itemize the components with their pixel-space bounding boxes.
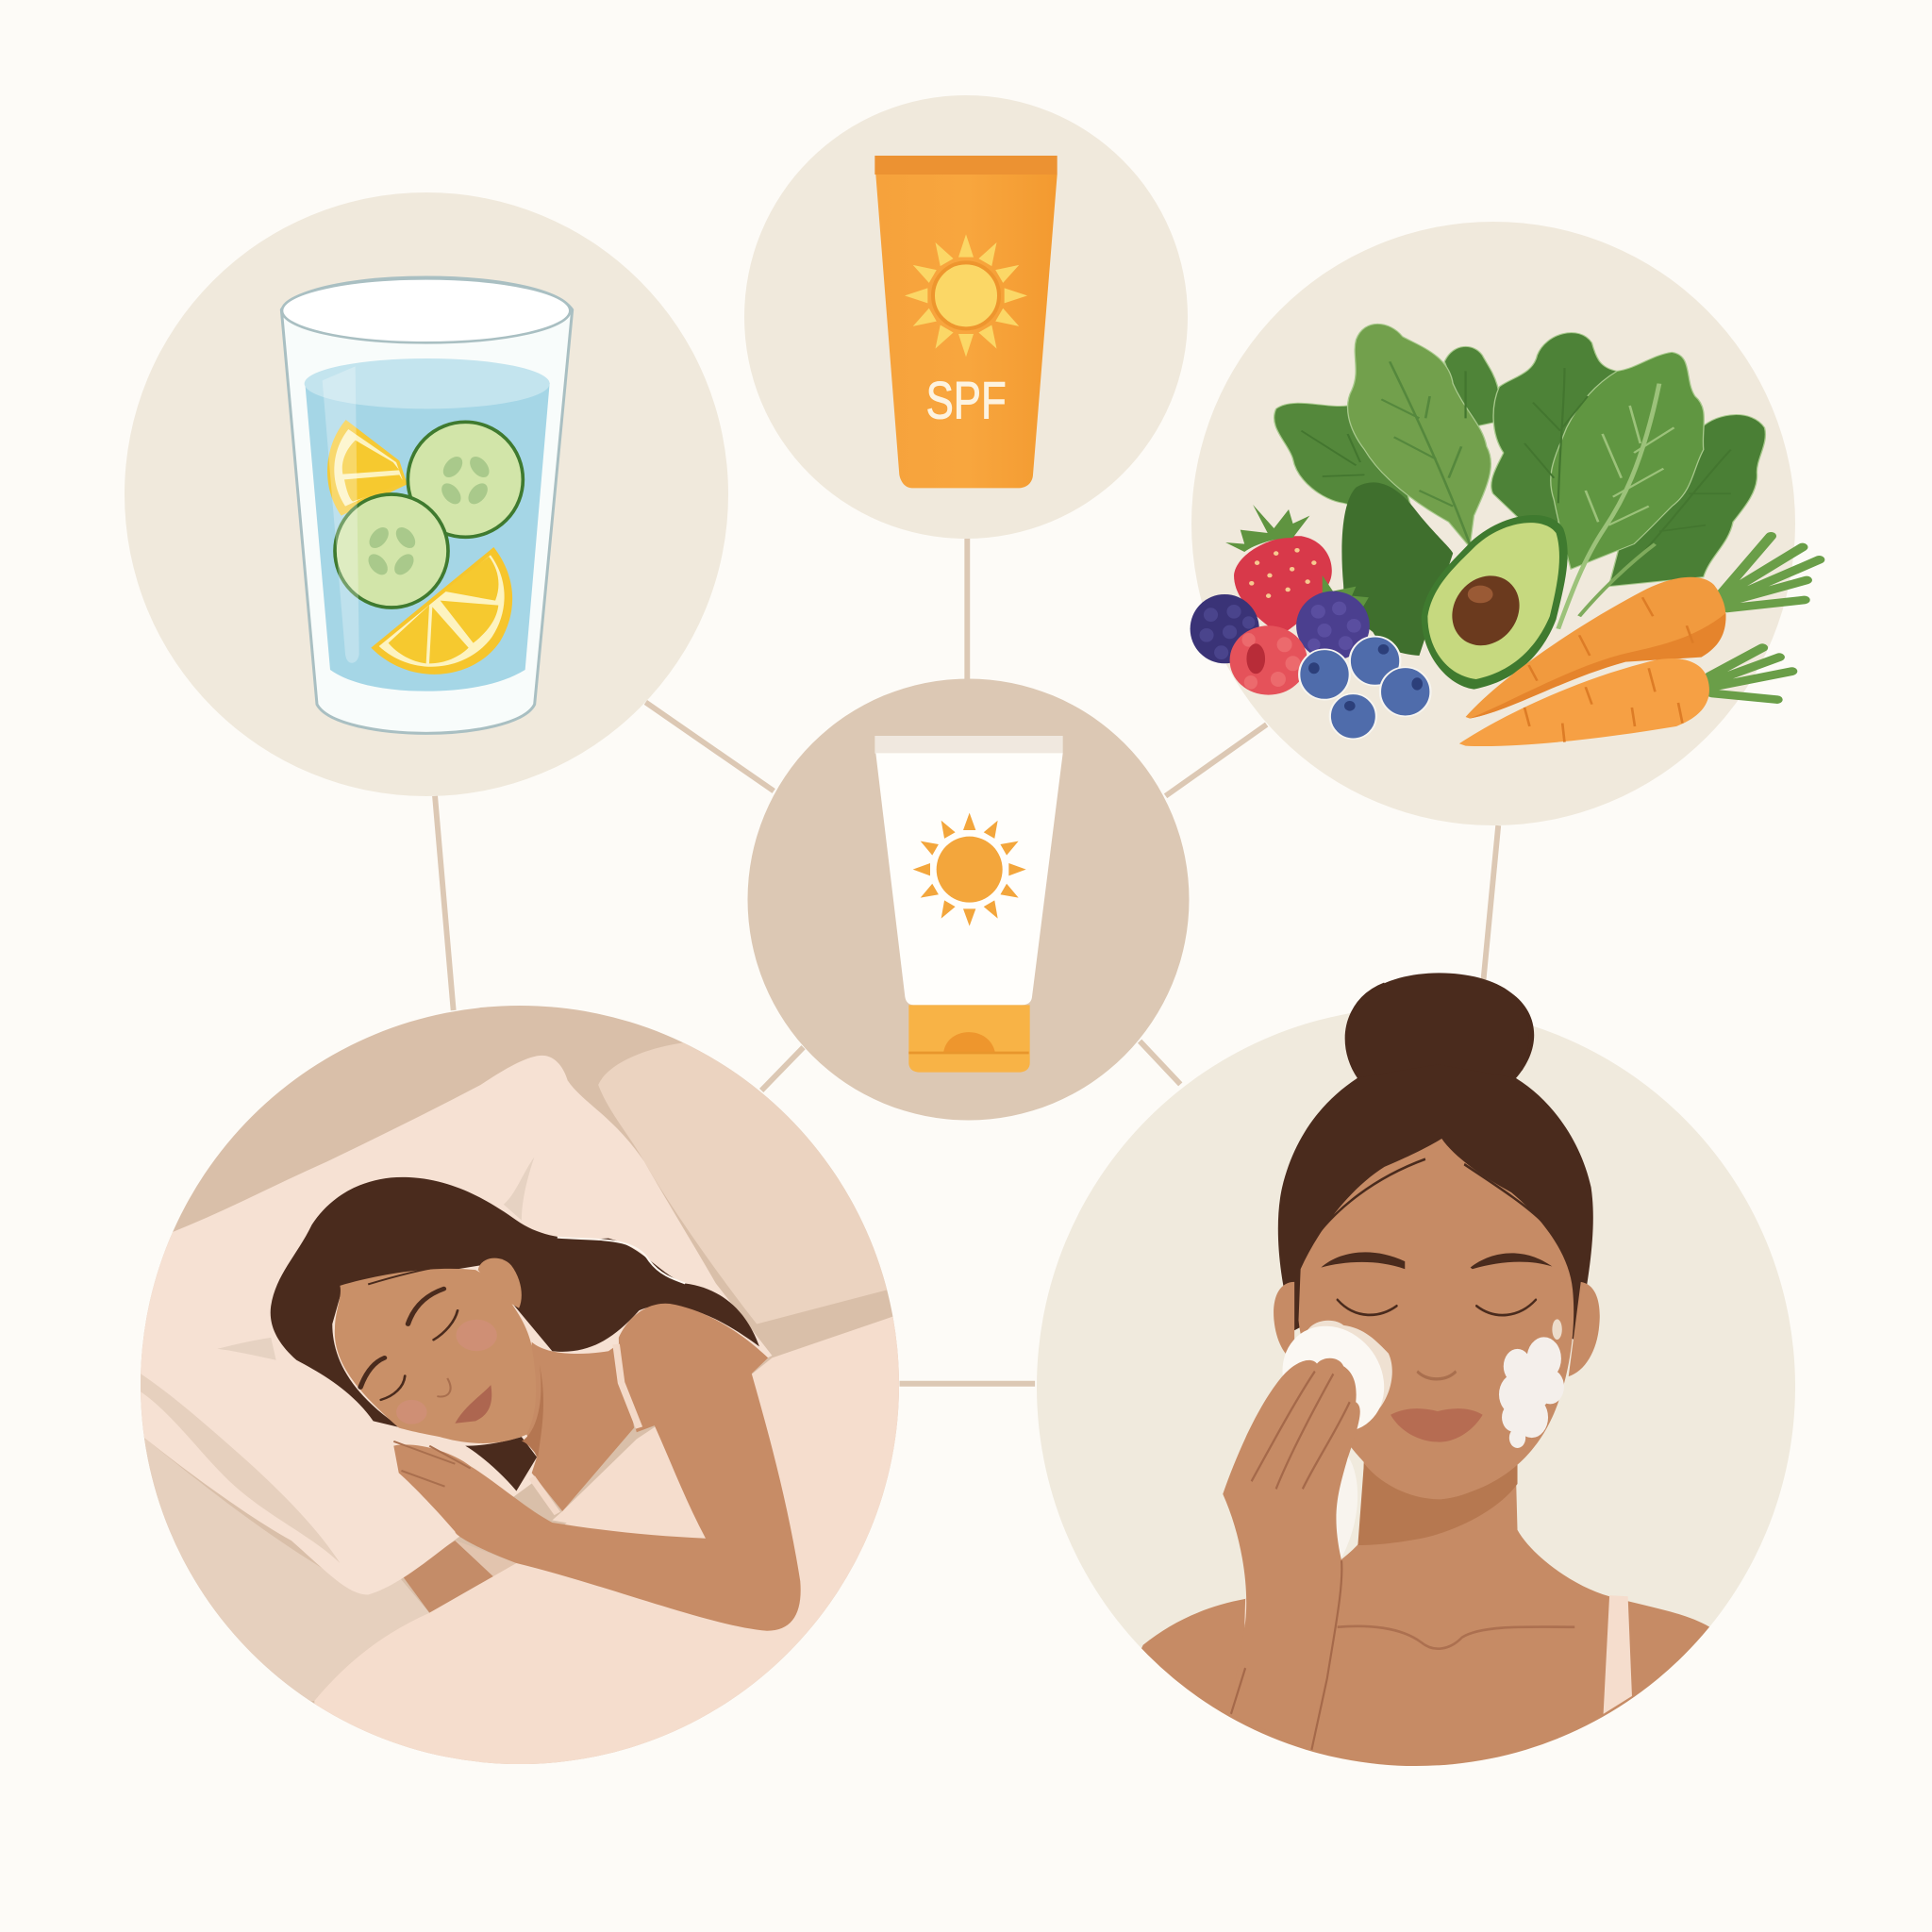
- hand: [1223, 1358, 1360, 1750]
- illustration: woman cleansing her face: [1141, 973, 1709, 1766]
- icon: sun on SPF tube: [905, 234, 1027, 357]
- panel: hydration water glass: [125, 192, 728, 796]
- icon: avocado half: [1422, 515, 1568, 690]
- body clipped to circle: [1141, 1462, 1709, 1766]
- icon: vegetables and berries: [1191, 324, 1820, 746]
- icon: raspberry: [1230, 625, 1307, 695]
- face: [1298, 1139, 1574, 1499]
- hair: [271, 1177, 759, 1428]
- icon: blueberries: [1299, 637, 1431, 739]
- icon: white sunscreen tube: [874, 736, 1063, 1073]
- icon: sun on white tube: [913, 813, 1026, 926]
- face: [335, 1269, 536, 1443]
- panel: sleep: [141, 1006, 899, 1764]
- icon: lemon wedge bottom: [371, 547, 512, 675]
- icon: whole avocado: [1341, 482, 1453, 656]
- panel: center sunscreen tube: [747, 679, 1189, 1121]
- connector lines: [435, 539, 1498, 1384]
- foam on cheek: [1499, 1319, 1564, 1448]
- icon: lemon wedge top: [327, 420, 408, 516]
- panel: face cleansing background: [1037, 1008, 1795, 1766]
- panel: sunscreen SPF tube: [744, 95, 1188, 539]
- foam and cotton pad: [1271, 1308, 1396, 1558]
- icon: cucumber slices: [335, 422, 523, 608]
- icon: blackberries: [1191, 575, 1370, 663]
- icon: strawberry: [1225, 505, 1332, 635]
- blanket: [314, 1317, 899, 1764]
- chest and neck: [526, 1342, 634, 1511]
- hair: [1278, 1064, 1593, 1341]
- icon: orange SPF tube: [874, 156, 1058, 488]
- illustration: sleeping woman on pillow: [141, 1043, 899, 1764]
- icon: carrots: [1459, 536, 1820, 746]
- camisole: [553, 1426, 663, 1523]
- hair bun: [1345, 973, 1534, 1079]
- icon: glass of water with lemon and cucumber: [281, 277, 573, 733]
- label: SPF: SPF: [926, 370, 1007, 429]
- panel: nutrition foods: [1191, 222, 1820, 825]
- ears: [1274, 1282, 1600, 1376]
- arm and shoulder: [393, 1304, 801, 1631]
